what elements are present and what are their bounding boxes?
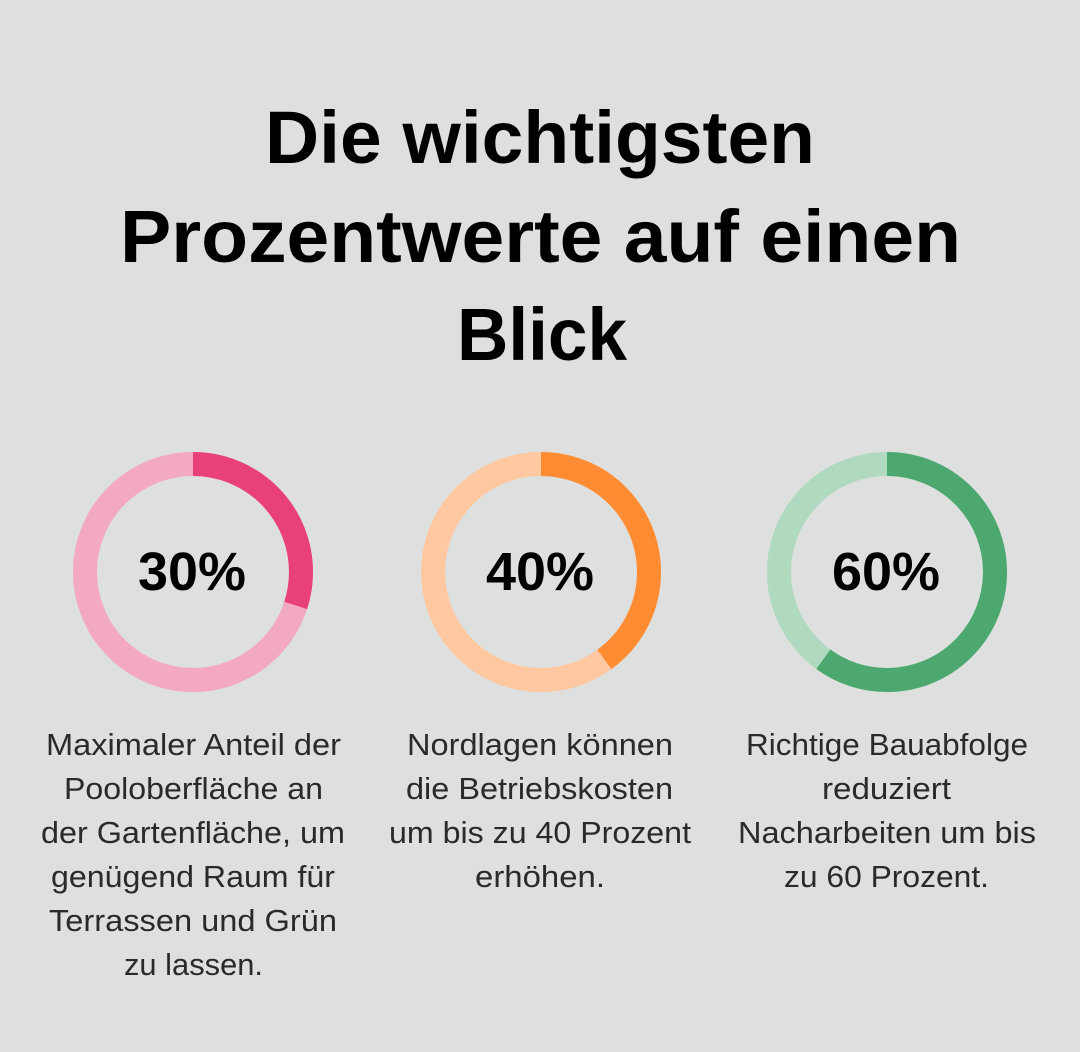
- donut chart: 30%: [85, 464, 301, 680]
- description: 40 percent: um bis zu 40 Prozent: [389, 815, 691, 850]
- description: 30 percent: Maximaler Anteil der: [46, 727, 341, 762]
- panel: 30 percent: [41, 464, 345, 982]
- description: 30 percent: [41, 727, 345, 982]
- description: 30 percent: Pooloberfläche an: [64, 771, 323, 806]
- donut chart: 40%: [433, 464, 649, 680]
- description: 40 percent: [389, 727, 691, 894]
- description: 40 percent: Nordlagen können: [407, 727, 673, 762]
- title: [120, 96, 961, 376]
- panel: 60 percent: [738, 464, 1036, 894]
- description: 30 percent: genügend Raum für: [51, 859, 335, 894]
- description: 60 percent: [738, 727, 1036, 894]
- donut chart: 60%: 60%: [832, 542, 940, 602]
- title: Die wichtigsten: [265, 96, 815, 179]
- panel: 40 percent: [389, 464, 691, 894]
- donut chart: 40%: 40%: [486, 542, 594, 602]
- description: 60 percent: zu 60 Prozent.: [784, 859, 989, 894]
- description: 60 percent: reduziert: [822, 771, 951, 806]
- title: Prozentwerte auf einen: [120, 195, 961, 278]
- description: 40 percent: die Betriebskosten: [406, 771, 673, 806]
- description: 60 percent: Nacharbeiten um bis: [738, 815, 1036, 850]
- description: 40 percent: erhöhen.: [475, 859, 605, 894]
- description: 30 percent: der Gartenfläche, um: [41, 815, 345, 850]
- donut chart: 30%: 30%: [138, 542, 246, 602]
- donut chart: 60%: [779, 464, 995, 680]
- description: 30 percent: zu lassen.: [124, 947, 263, 982]
- title: Blick: [457, 293, 628, 376]
- description: 60 percent: Richtige Bauabfolge: [746, 727, 1028, 762]
- description: 30 percent: Terrassen und Grün: [49, 903, 337, 938]
